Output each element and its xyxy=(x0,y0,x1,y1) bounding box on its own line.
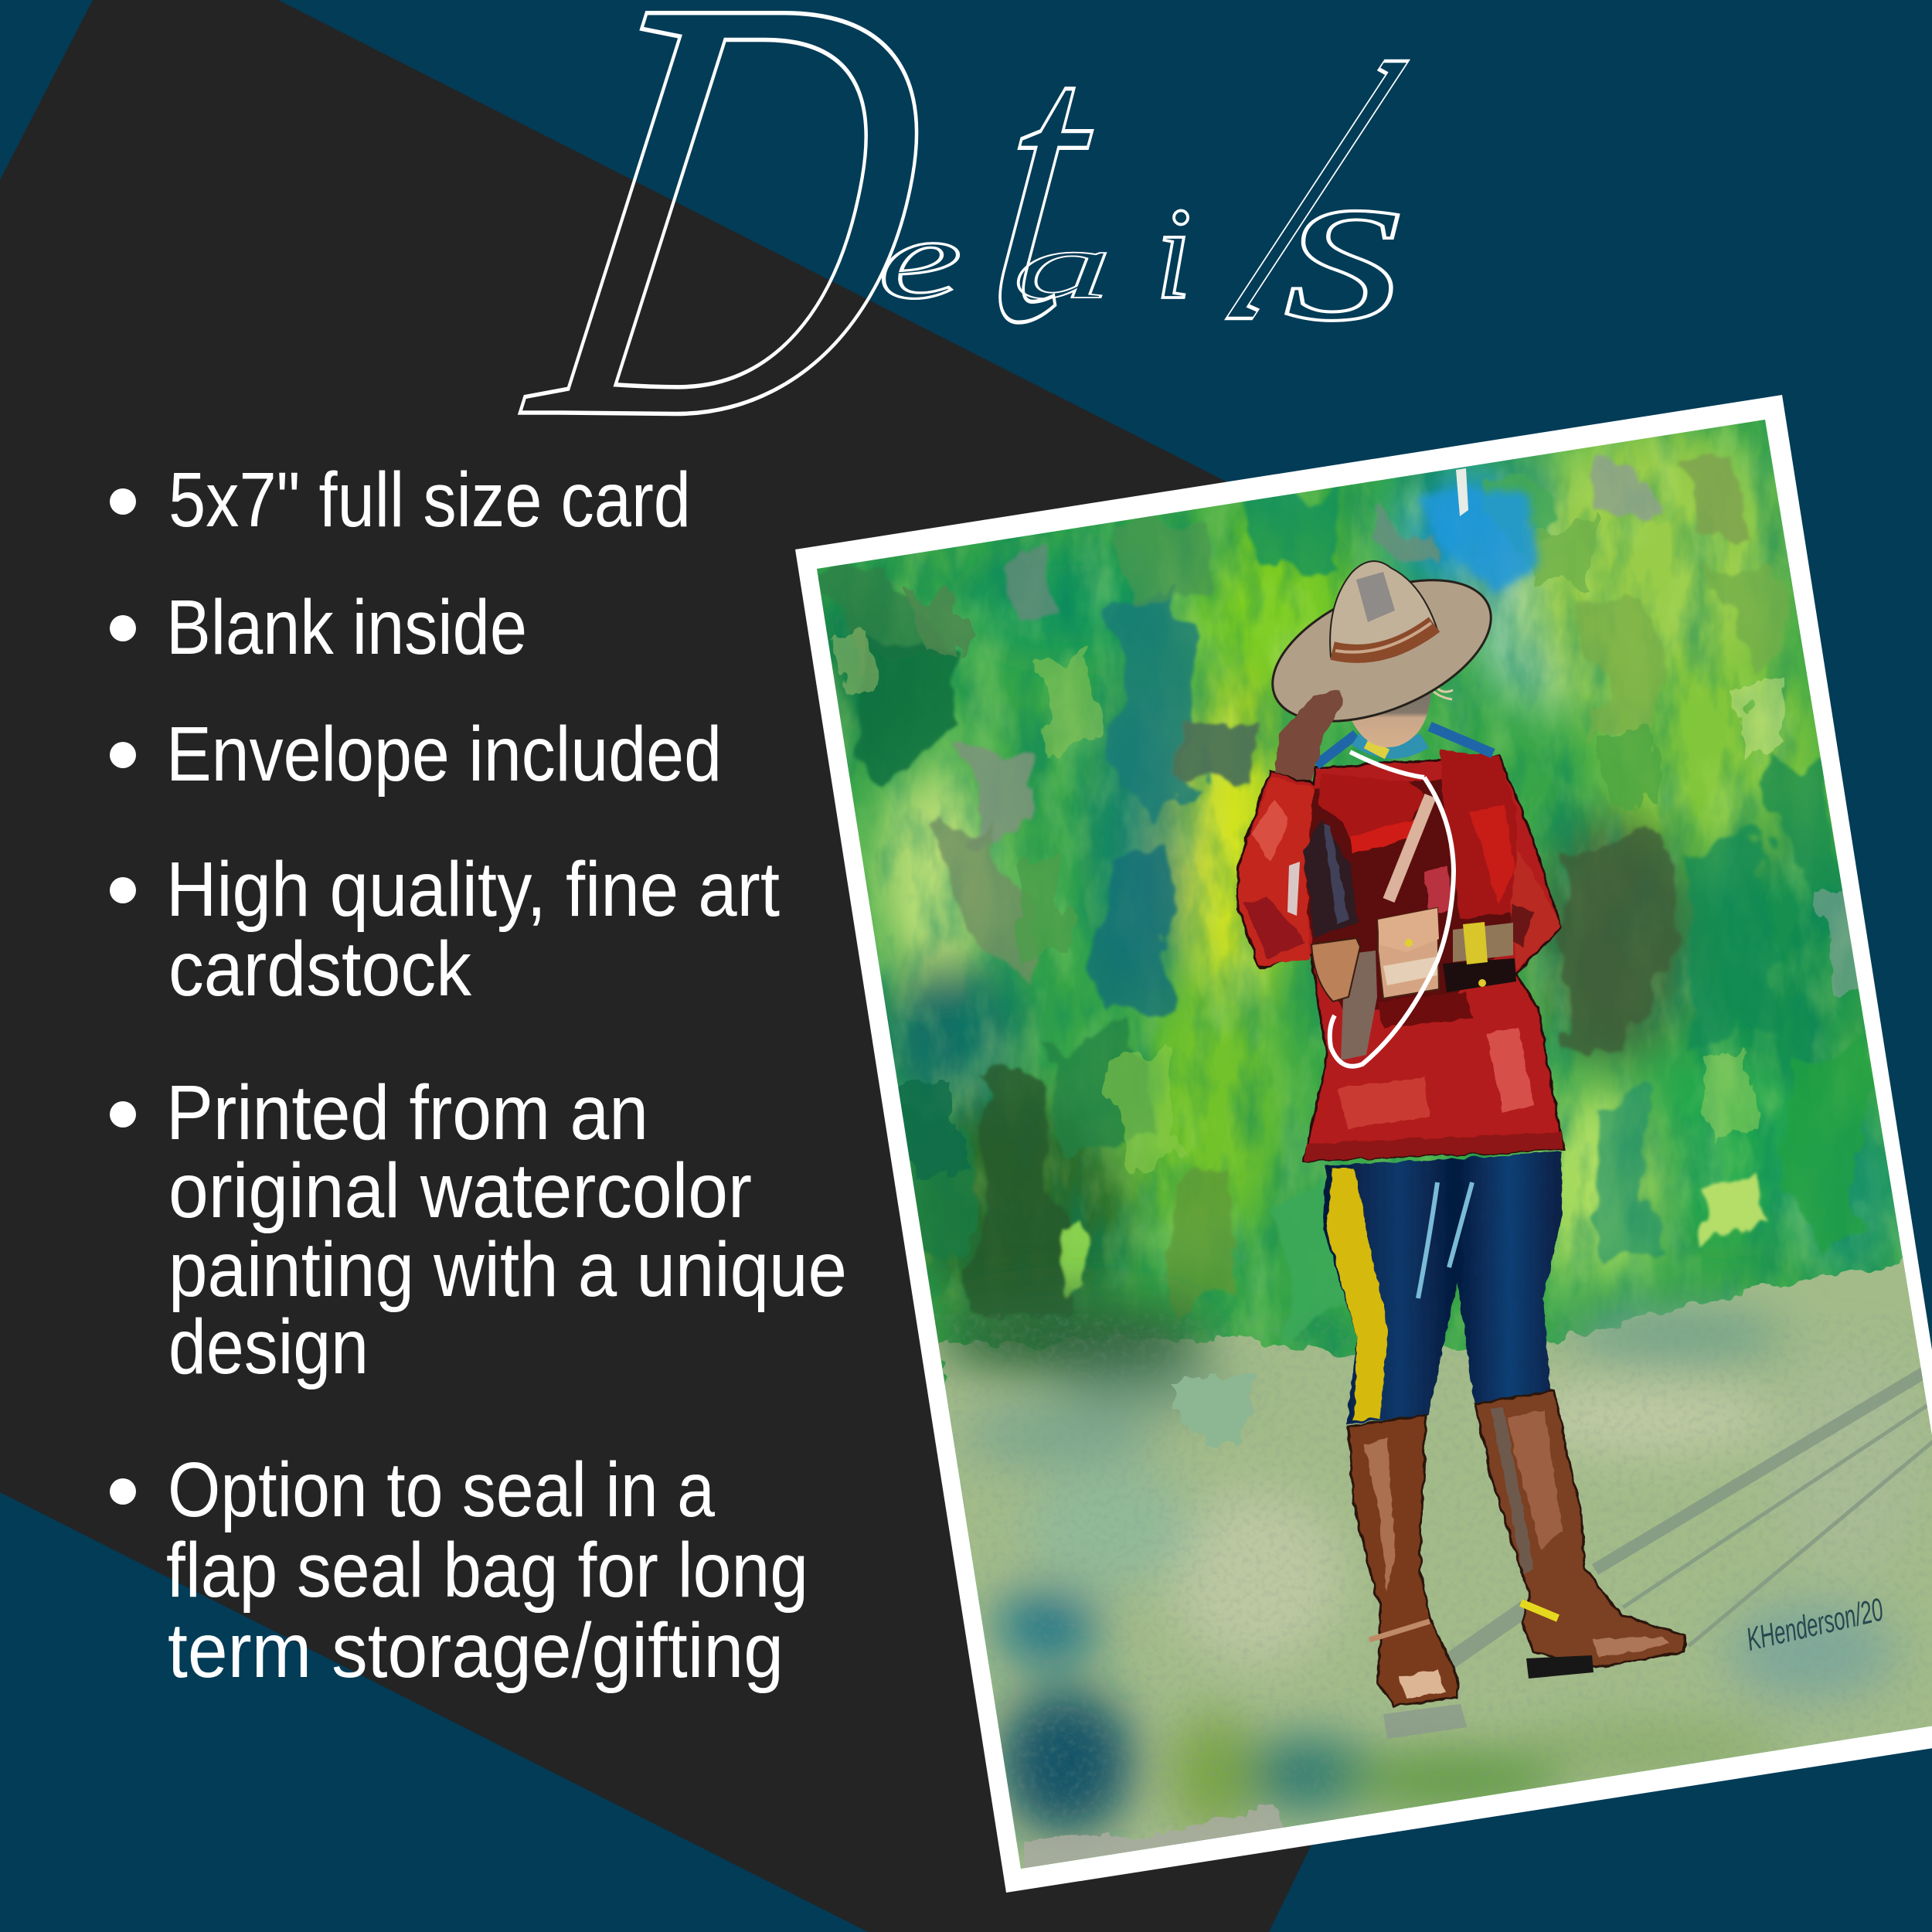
bullet: seal option: Option to seal in a xyxy=(168,1447,715,1533)
bullet: seal option: term storage/gifting xyxy=(168,1607,784,1694)
panel: watercolor painting xyxy=(773,386,1932,1924)
figure: jacket xyxy=(1238,750,1563,1161)
bullet: cardstock: High quality, fine art xyxy=(166,846,780,933)
figure: neck and face xyxy=(1343,688,1431,747)
figure: right torso xyxy=(1440,750,1517,919)
figure: left ankle strap xyxy=(1369,1621,1430,1640)
painting: ground wash xyxy=(937,1257,1932,1885)
painting: jagged foliage patches xyxy=(832,437,1870,1337)
card: white tick mark xyxy=(1456,468,1468,516)
hat band xyxy=(1332,624,1434,654)
title: i xyxy=(1155,181,1192,326)
title: s xyxy=(1283,115,1407,368)
bullet: printed from original: original watercolor xyxy=(168,1148,752,1234)
figure: dark chest xyxy=(1302,777,1519,1012)
figure: right boot xyxy=(1475,1391,1685,1668)
figure: belt xyxy=(1443,922,1516,992)
figure: saluting hand xyxy=(1275,690,1343,782)
signature: KHenderson/20 xyxy=(1743,1592,1887,1658)
bullet: printed from original: painting with a unique xyxy=(168,1226,847,1313)
figure: sleeve cuff mark xyxy=(1287,862,1300,916)
bullet: blank inside: Blank inside xyxy=(166,584,527,671)
painting: blue sky patch xyxy=(1417,487,1540,591)
painting: sage bleed xyxy=(1171,1374,1257,1447)
figure: shoulder strap xyxy=(1389,796,1430,900)
figure: foot shadow xyxy=(1383,1704,1467,1739)
painting: soft colour washes xyxy=(807,419,1910,1318)
bullet list xyxy=(110,457,847,1694)
figure: spur xyxy=(1521,1603,1558,1618)
figure: holster xyxy=(1341,951,1377,1060)
panel: white card xyxy=(795,395,1932,1893)
title: a xyxy=(1012,213,1113,318)
bullet: printed from original: design xyxy=(168,1304,369,1390)
figure: left pouch xyxy=(1311,938,1360,1002)
figure: lanyard xyxy=(1330,752,1454,1066)
painting: base wash xyxy=(773,386,1932,1924)
figure: sleeve xyxy=(1240,777,1314,966)
bullet: cardstock: cardstock xyxy=(168,926,472,1012)
title: e xyxy=(878,195,962,322)
bullet: seal option xyxy=(110,1447,808,1694)
painting: streak mottling xyxy=(773,386,1932,1546)
bullet: envelope: Envelope included xyxy=(166,711,722,798)
bullet: printed from original: Printed from an xyxy=(166,1070,648,1156)
figure: hair xyxy=(1434,684,1453,699)
figure: pants xyxy=(1323,1152,1563,1423)
bullet: 5x7 card: 5x7" full size card xyxy=(168,457,691,543)
figure: right breast pocket xyxy=(1468,805,1515,905)
figure: left boot xyxy=(1349,1415,1458,1706)
title: l xyxy=(1171,0,1454,399)
figure: skirt shading xyxy=(1378,992,1472,1028)
title xyxy=(495,0,1454,546)
painting: ground paper grain xyxy=(927,1314,1932,1893)
figure: centre pouch xyxy=(1378,908,1439,998)
painting: bottom speckle edge xyxy=(1024,1804,1287,1874)
figure: boot heel xyxy=(1526,1655,1594,1679)
bullet: cardstock xyxy=(110,846,780,1012)
bullet: seal option: flap seal bag for long xyxy=(166,1527,808,1614)
figure: blue epaulette xyxy=(1316,726,1493,765)
painting: road tracks xyxy=(1444,1372,1932,1665)
figure: yellow stripe xyxy=(1326,1168,1388,1420)
figure: right arm xyxy=(1511,850,1561,971)
bullet: printed from original xyxy=(110,1070,847,1390)
figure: upper chest xyxy=(1319,774,1424,843)
painting: small olive and grey leaves xyxy=(838,518,1870,1177)
figure: collar xyxy=(1356,738,1424,750)
figure: hat xyxy=(1252,551,1512,750)
figure: arm shadow xyxy=(1304,819,1358,937)
figure: pink chest xyxy=(1424,866,1453,917)
figure: chest pocket xyxy=(1350,819,1414,853)
